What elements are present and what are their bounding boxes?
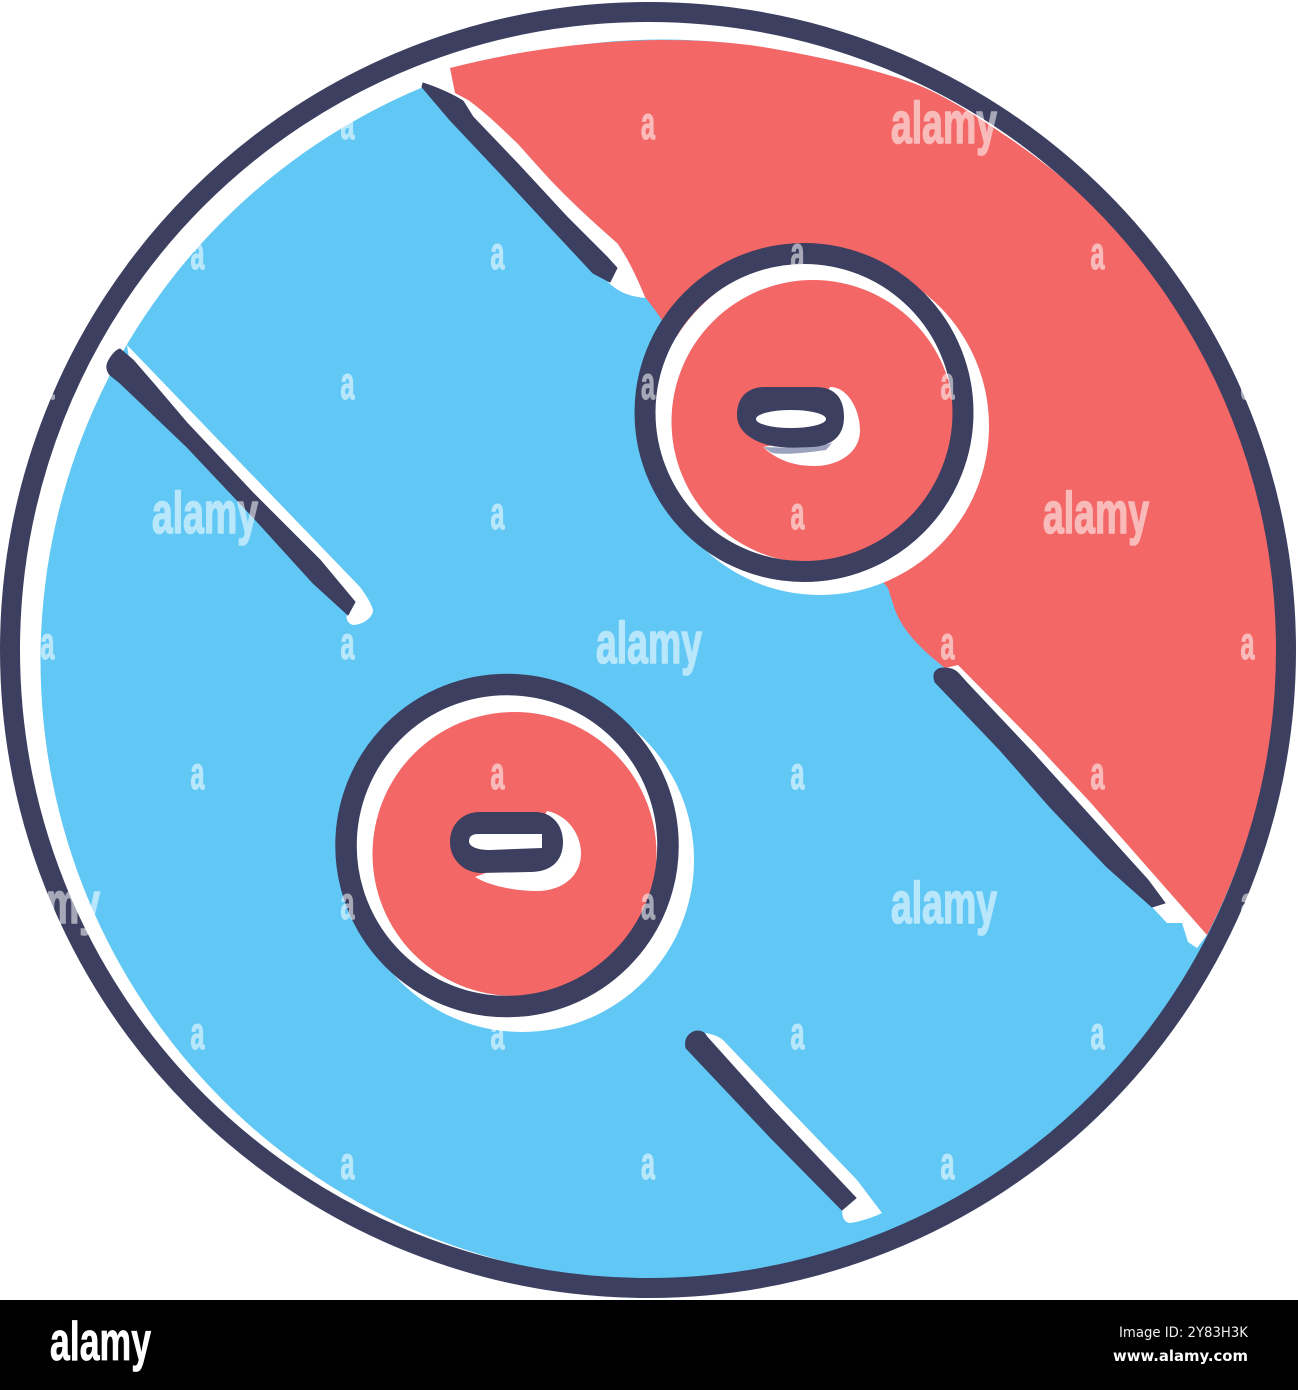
lower button [346, 684, 694, 1032]
large watermarks: alamy [1043, 481, 1149, 546]
small watermark marks: a [1090, 227, 1105, 279]
small watermark marks: a [190, 227, 205, 279]
upper dash [422, 83, 617, 282]
small watermark marks: a [1240, 617, 1255, 669]
footer bar [0, 1300, 1298, 1390]
small watermark marks: a [190, 1007, 205, 1059]
footer logo: alamy [50, 1310, 151, 1372]
bottom dash [686, 1031, 856, 1210]
small watermark marks: a [1240, 357, 1255, 409]
small watermark marks: a [1240, 877, 1255, 929]
small watermark marks: a [641, 97, 655, 149]
small watermark marks: a [340, 877, 355, 929]
small watermark marks: a [490, 747, 505, 799]
small watermark marks: a [641, 877, 655, 929]
small watermark marks: a [641, 1137, 655, 1189]
small watermark marks: a [40, 617, 55, 669]
small watermark marks: a [340, 617, 355, 669]
small watermark marks: a [340, 1137, 355, 1189]
right dash [934, 668, 1165, 907]
small watermark marks: a [790, 487, 805, 539]
large watermarks: alamy [596, 611, 702, 676]
large watermarks: alamy [891, 91, 997, 156]
large watermarks: alamy [152, 481, 258, 546]
small watermark marks: a [340, 97, 355, 149]
upper button [645, 254, 989, 595]
small watermark marks [40, 97, 1255, 1189]
small watermark marks: a [490, 487, 505, 539]
small watermark marks: a [940, 1137, 955, 1189]
red segment [450, 40, 1278, 935]
small watermark marks: a [490, 1007, 505, 1059]
small watermark marks: a [340, 357, 355, 409]
small watermark marks: a [1090, 1007, 1105, 1059]
small watermark marks: a [940, 357, 955, 409]
small watermark marks: a [790, 747, 805, 799]
small watermark marks: a [1090, 747, 1105, 799]
large watermarks: alamy [891, 871, 997, 936]
white gap beside right dash [945, 660, 1207, 948]
left dash [107, 349, 355, 615]
small watermark marks: a [490, 227, 505, 279]
white gap beside upper dash [420, 66, 650, 298]
white gap beside bottom dash [700, 1033, 882, 1223]
small watermark marks: a [940, 617, 955, 669]
small watermark marks: a [790, 1007, 805, 1059]
image id: Image ID: 2Y83H3K [1119, 1325, 1248, 1341]
small watermark marks: a [790, 227, 805, 279]
small watermark marks: a [190, 747, 205, 799]
site url: www.alamy.com [1113, 1347, 1248, 1365]
large watermarks [0, 91, 1149, 936]
small watermark marks: a [40, 357, 55, 409]
small watermark marks: a [641, 357, 655, 409]
white gap beside left dash [127, 345, 373, 625]
